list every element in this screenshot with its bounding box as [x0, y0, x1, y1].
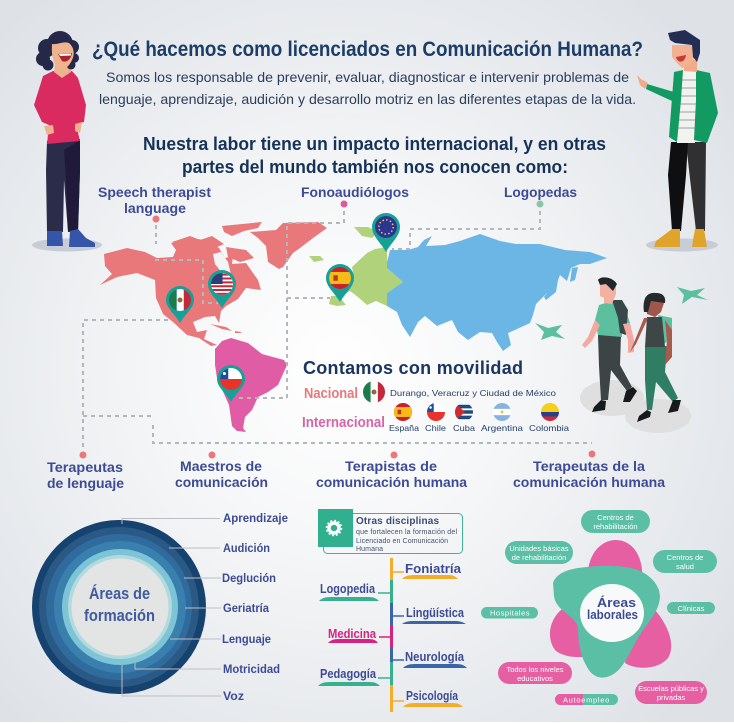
- pill: escuelas públicas y privadas: Escuelas públicas y: [638, 684, 704, 693]
- connector: speech therapist: [152, 216, 218, 303]
- pill: clínicas: [667, 602, 715, 614]
- center title: Áreas: [597, 595, 636, 610]
- label: terapistas de comunicación humana: Terapistas de: [345, 458, 437, 474]
- flag: españa: [394, 403, 412, 421]
- branch: psicología: Psicología: [406, 689, 459, 703]
- map: hudson bay: [213, 252, 232, 279]
- label: nacional: Nacional: [304, 385, 358, 402]
- pill: unidades básicas: de rehabilitación: [512, 553, 566, 562]
- intro text: Somos los responsable de prevenir, evaluar, diagnosticar e intervenir problemas de: [106, 69, 629, 85]
- labels: areas: Lenguaje: [222, 634, 271, 646]
- pill: centros de salud: [653, 550, 717, 573]
- character: woman: [32, 31, 102, 252]
- connector: fonoaudiólogos: [238, 200, 348, 398]
- label: terapistas de comunicación humana: comunicación humana: [316, 474, 467, 490]
- label: speech therapist: Speech therapist: [98, 184, 211, 200]
- flag: mexico: [363, 381, 386, 403]
- branch: logopedia: [319, 582, 392, 601]
- label: terapeutas de lenguaje: Terapeutas: [47, 459, 123, 475]
- label: terapistas de comunicación humana: [316, 458, 467, 490]
- description: Humana: [356, 546, 383, 553]
- icon: plane near map: [535, 323, 565, 340]
- pill: escuelas públicas y privadas: privadas: [657, 693, 685, 702]
- text: nacional cities: Durango, Veracruz y Ciudad de México: [390, 388, 556, 398]
- text: country names: Chile: [425, 423, 446, 433]
- description: Licenciado en Comunicación: [356, 538, 448, 545]
- woman traveller: [630, 293, 681, 422]
- subheading: [143, 133, 606, 177]
- labels: areas: Audición: [223, 543, 270, 555]
- icon: gear: [318, 509, 353, 547]
- text: chart title: Áreas de: [89, 584, 150, 603]
- map: iceland and britain: [309, 227, 378, 262]
- label: speech therapist: language: [124, 200, 186, 216]
- pill: hospitales: Hospitales: [490, 608, 530, 618]
- panel: otras disciplinas: [318, 509, 462, 554]
- leader lines: [122, 518, 221, 696]
- label: speech therapist: [98, 184, 211, 216]
- chart: discipline tree: [318, 558, 467, 712]
- labels: areas: [222, 513, 288, 703]
- labels: areas: Deglución: [222, 573, 276, 585]
- text: country names: España: [389, 423, 419, 433]
- trunk: [390, 558, 393, 712]
- map: greenland: [250, 222, 327, 269]
- connector: bottom labels: [153, 425, 596, 458]
- pill: centros de rehabilitación: Centros de: [597, 513, 634, 522]
- branch: neurología: [392, 650, 467, 668]
- heading: contamos con movilidad: Contamos con movilidad: [303, 358, 523, 378]
- pill: centros de rehabilitación: [581, 510, 650, 533]
- map: north america: [100, 238, 261, 346]
- pill: todos los niveles educativos: [498, 662, 572, 684]
- branch: logopedia: Logopedia: [320, 582, 376, 596]
- description: que fortalecen la formación del: [356, 529, 457, 536]
- heading: Otras disciplinas: [356, 516, 439, 527]
- pill: autoempleo: [555, 694, 618, 705]
- pin: usa: [208, 270, 236, 308]
- pin: mexico: [166, 286, 194, 323]
- label: terapeutas de la comunicación humana: Terapeutas de la: [533, 458, 645, 474]
- pin: chile: [217, 365, 245, 402]
- text: country names: Cuba: [453, 423, 475, 433]
- connector: terapeutas de lenguaje: [80, 320, 170, 458]
- labels: areas: Motricidad: [223, 664, 280, 676]
- branch: lingüística: Lingüística: [406, 606, 465, 620]
- center title: [587, 595, 638, 622]
- character: man: [637, 30, 718, 252]
- branch: psicología: [392, 689, 463, 707]
- subheading: partes del mundo también nos conocen como:: [182, 156, 568, 177]
- man traveller: [582, 277, 637, 412]
- label: terapeutas de la comunicación humana: comunicación humana: [513, 474, 665, 490]
- connector: logopedas: [392, 200, 544, 249]
- label: maestros de comunicación: [175, 458, 268, 490]
- branch: pedagogía: Pedagogía: [320, 667, 377, 681]
- map: japan and sakhalin: [544, 267, 578, 300]
- map: asia: [387, 234, 607, 351]
- illustration: travelling couple: [580, 277, 691, 433]
- pill: unidades básicas: [505, 541, 573, 564]
- pill: autoempleo: Autoempleo: [563, 696, 610, 704]
- pill: centros de salud: Centros de: [667, 553, 703, 562]
- pill: centros de rehabilitación: rehabilitación: [593, 522, 638, 531]
- flag: chile: [427, 403, 445, 421]
- pill: hospitales: [481, 607, 538, 618]
- icon: plane upper right: [677, 287, 708, 304]
- label: terapeutas de lenguaje: de lenguaje: [47, 475, 124, 491]
- pill: unidades básicas: Unidades básicas: [509, 544, 569, 553]
- labels: areas: Voz: [223, 691, 244, 703]
- branch: foniatría: [392, 562, 462, 579]
- text: chart title: formación: [84, 607, 155, 625]
- intro text: [99, 69, 636, 107]
- pill: escuelas públicas y privadas: [635, 681, 707, 704]
- label: terapeutas de la comunicación humana: [513, 458, 665, 490]
- labels: areas: Aprendizaje: [223, 513, 288, 525]
- text: country names: [389, 423, 569, 433]
- world map: [100, 222, 607, 432]
- label: internacional: Internacional: [302, 414, 385, 431]
- chart: áreas laborales: [481, 510, 717, 705]
- text: country names: Argentina: [481, 423, 523, 433]
- branch: neurología: Neurología: [405, 650, 465, 664]
- panel: movilidad: [302, 358, 569, 433]
- text: chart title: [84, 584, 155, 625]
- pill: todos los niveles educativos: Todos los niveles: [506, 665, 564, 674]
- flag: colombia: [541, 403, 559, 421]
- text: country names: Colombia: [529, 423, 569, 433]
- map: caribbean: [210, 324, 241, 333]
- description: [356, 529, 457, 553]
- central blob: [553, 566, 660, 678]
- title: ¿Qué hacemos como licenciados en Comunicación Humana?: [92, 37, 643, 61]
- petals: [550, 540, 671, 668]
- branch: lingüística: [392, 606, 466, 624]
- branch: pedagogía: [318, 667, 392, 686]
- intro text: lenguaje, aprendizaje, audición y desarrollo motriz en las diferentes etapas de la vida.: [99, 91, 636, 107]
- subheading: Nuestra labor tiene un impacto internacional, y en otras: [143, 133, 606, 154]
- label: logopedas: Logopedas: [504, 184, 577, 200]
- flag: argentina: [493, 403, 511, 421]
- pin: spain: [326, 264, 354, 302]
- pill: todos los niveles educativos: educativos: [517, 674, 553, 683]
- map: south america: [215, 338, 287, 432]
- label: fonoaudiólogos: Fonoaudiólogos: [301, 184, 409, 200]
- pin: european union: [372, 213, 400, 252]
- map: arctic islands: [172, 222, 262, 262]
- map: europe: [329, 247, 403, 306]
- center circle: [580, 584, 644, 642]
- branch: medicina: Medicina: [328, 627, 377, 641]
- pill: centros de salud: salud: [676, 562, 694, 571]
- branch: foniatría: Foniatría: [405, 562, 462, 576]
- label: terapeutas de lenguaje: [47, 459, 124, 491]
- label: maestros de comunicación: Maestros de: [180, 458, 262, 474]
- labels: areas: Geriatría: [223, 603, 270, 615]
- label: maestros de comunicación: comunicación: [175, 474, 268, 490]
- chart: áreas de formación: [32, 513, 288, 703]
- pill: clínicas: Clínicas: [678, 604, 705, 613]
- flag: cuba: [455, 403, 473, 421]
- center title: laborales: [587, 607, 638, 622]
